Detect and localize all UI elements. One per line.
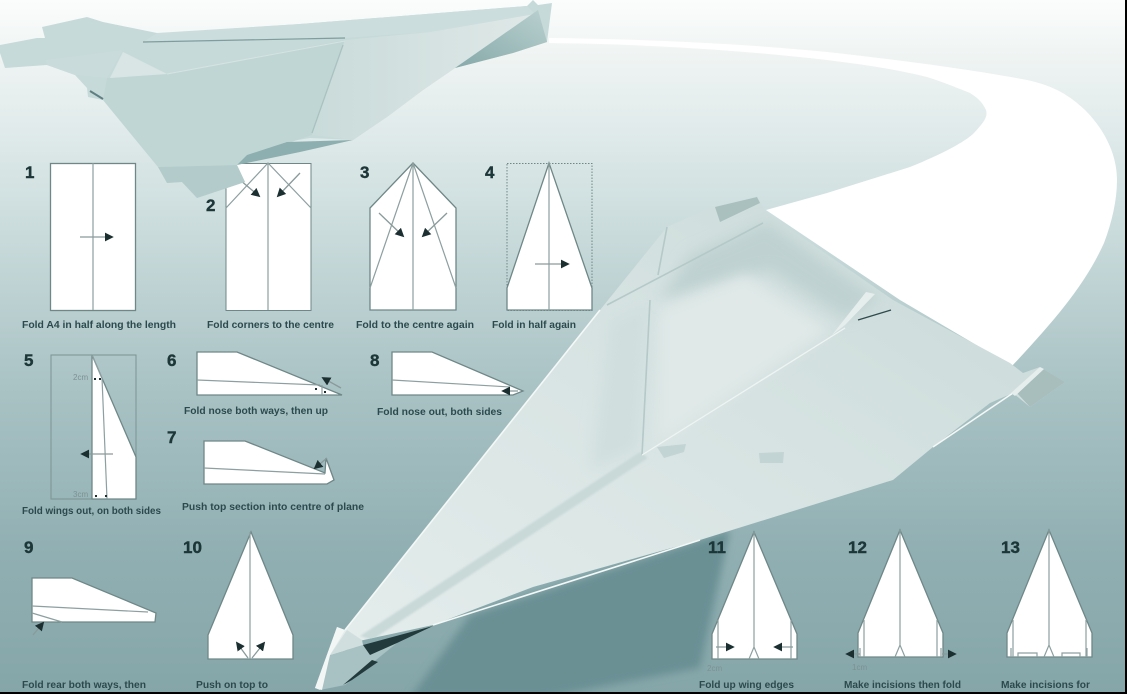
step 1 number: 1	[25, 163, 34, 182]
tape tabs	[715, 197, 760, 222]
tail tab	[158, 165, 245, 198]
step 1 caption: Fold A4 in half along the length	[22, 320, 176, 331]
shaded upper wing	[667, 225, 872, 316]
step 4 diagram	[507, 163, 592, 310]
shaded inner panel	[663, 274, 820, 420]
tail fin band	[45, 50, 123, 78]
step 5 diagram	[51, 355, 136, 499]
step 2 number: 2	[206, 196, 215, 215]
step 2 diagram	[226, 163, 311, 310]
step 6 caption: Fold nose both ways, then up	[184, 406, 328, 417]
step 9 number: 9	[24, 538, 33, 557]
large paper plane photo	[315, 197, 1065, 690]
step 6 diagram	[197, 352, 342, 395]
step 13 diagram	[1007, 530, 1092, 657]
step 12 diagram: 1cm	[852, 663, 867, 672]
right wing	[312, 14, 535, 140]
step 5 diagram: 2cm	[73, 373, 88, 382]
step 2 caption: Fold corners to the centre	[207, 320, 334, 331]
soft wing shading	[360, 222, 880, 640]
shadow beneath large plane	[410, 530, 730, 694]
step 12 diagram	[847, 530, 955, 672]
step 5 number: 5	[24, 351, 33, 370]
black right edge	[1125, 0, 1127, 694]
step 3 diagram	[370, 163, 456, 310]
step 5 diagram: 3cm	[73, 490, 88, 499]
step 9 caption: Fold rear both ways, then	[22, 680, 146, 691]
step 1 diagram	[50, 163, 136, 310]
white notch	[110, 52, 167, 78]
step 10 diagram	[208, 532, 293, 659]
step 8 number: 8	[370, 351, 379, 370]
step 10 caption: Push on top to	[196, 680, 268, 691]
step 3 number: 3	[360, 163, 369, 182]
step 13 caption: Make incisions for	[1001, 680, 1090, 691]
step 11 caption: Fold up wing edges	[699, 680, 794, 691]
shaded left panel edge	[600, 393, 632, 458]
step 11 diagram	[707, 532, 797, 673]
step 11 diagram: 2cm	[707, 664, 722, 673]
step 3 caption: Fold to the centre again	[356, 320, 474, 331]
step 4 number: 4	[485, 163, 495, 182]
nose folds	[320, 643, 397, 690]
step 11 number: 11	[708, 538, 726, 557]
plane creases	[143, 38, 345, 42]
step 4 caption: Fold in half again	[492, 320, 576, 331]
fold lines	[607, 223, 763, 455]
step 8 caption: Fold nose out, both sides	[377, 407, 502, 418]
step 12 caption: Make incisions then fold	[844, 680, 961, 691]
small paper plane photo	[0, 0, 552, 198]
step 7 caption: Push top section into centre of plane	[182, 502, 364, 513]
step 5 caption: Fold wings out, on both sides	[22, 506, 161, 517]
step 13 number: 13	[1001, 538, 1020, 557]
black bottom edge	[0, 692, 1127, 694]
step 12 number: 12	[848, 538, 867, 557]
step 7 diagram	[204, 441, 334, 484]
white flight-path swoosh	[549, 38, 1117, 366]
top wing	[143, 6, 535, 42]
lit body panel	[103, 40, 345, 167]
shaded centre fold	[360, 452, 648, 640]
step 6 number: 6	[167, 351, 176, 370]
underside fold	[237, 140, 353, 165]
step 9 diagram	[32, 578, 156, 635]
step 7 number: 7	[167, 428, 176, 447]
step 10 number: 10	[183, 538, 202, 557]
nose fold	[455, 10, 547, 68]
step 8 diagram	[392, 352, 523, 395]
